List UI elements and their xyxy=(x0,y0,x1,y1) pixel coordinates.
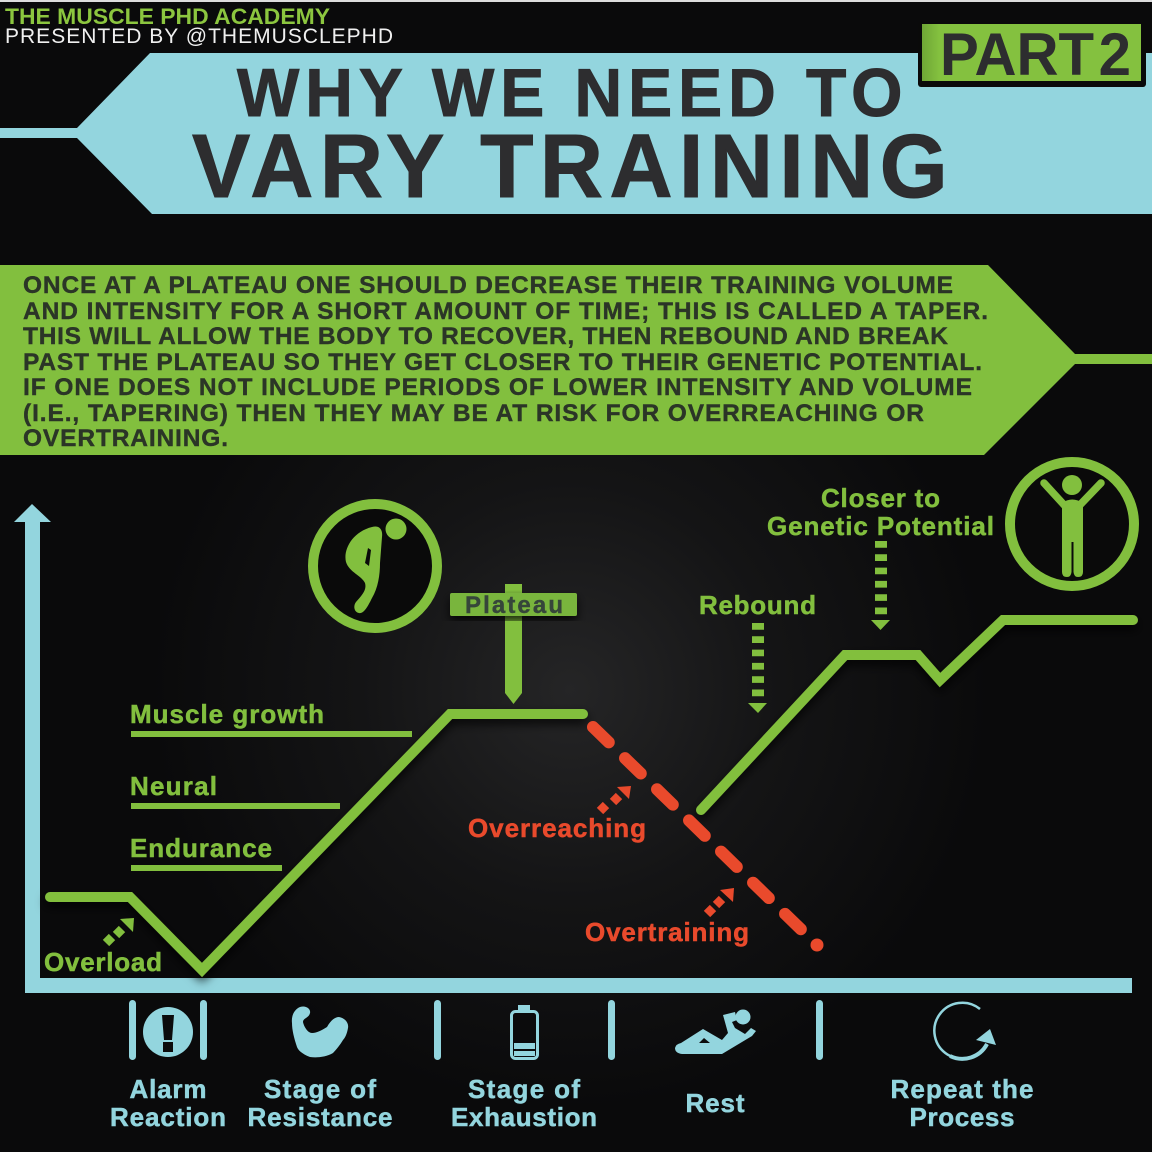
adaptation labels: Neural xyxy=(130,771,217,801)
academy header xyxy=(5,4,393,48)
overreaching label with arrow: Overreaching xyxy=(468,813,646,843)
icon: battery xyxy=(512,1005,538,1058)
stage labels: Stage of xyxy=(264,1074,376,1104)
intro text: AND INTENSITY FOR A SHORT AMOUNT OF TIME; THIS IS CALLED A TAPER. xyxy=(23,298,988,325)
overtraining label with arrow xyxy=(585,888,749,947)
genetic potential label with arrow xyxy=(767,483,994,630)
title banner xyxy=(0,53,1152,216)
genetic potential label with arrow: Genetic Potential xyxy=(767,511,994,541)
stage labels: Rest xyxy=(686,1088,745,1118)
academy header: PRESENTED BY @THEMUSCLEPHD xyxy=(5,25,393,48)
icon: slumped figure xyxy=(313,504,437,628)
stage labels: Resistance xyxy=(248,1102,392,1132)
plateau sign xyxy=(450,584,577,704)
icon: resting figure xyxy=(675,1010,756,1054)
rebound label with arrow: Rebound xyxy=(699,590,816,620)
overload label with arrow xyxy=(44,918,162,977)
stage labels: Exhaustion xyxy=(451,1102,597,1132)
stage labels: Reaction xyxy=(110,1102,226,1132)
chart axes xyxy=(14,504,1132,993)
intro text: (I.E., TAPERING) THEN THEY MAY BE AT RISK FOR OVERREACHING OR xyxy=(23,400,924,427)
adaptation labels xyxy=(130,699,412,871)
title text xyxy=(192,55,948,216)
intro text: IF ONE DOES NOT INCLUDE PERIODS OF LOWER INTENSITY AND VOLUME xyxy=(23,374,972,401)
intro text: THIS WILL ALLOW THE BODY TO RECOVER, THEN REBOUND AND BREAK xyxy=(23,323,948,350)
plateau sign: Plateau xyxy=(465,592,563,619)
overtraining label with arrow: Overtraining xyxy=(585,917,749,947)
academy header: THE MUSCLE PHD ACADEMY xyxy=(5,4,330,29)
overload label with arrow: Overload xyxy=(44,947,162,977)
title text: VARY TRAINING xyxy=(192,116,948,216)
intro text: PAST THE PLATEAU SO THEY GET CLOSER TO THEIR GENETIC POTENTIAL. xyxy=(23,349,982,376)
intro text xyxy=(23,272,988,452)
adaptation labels: Endurance xyxy=(130,833,272,863)
intro text: ONCE AT A PLATEAU ONE SHOULD DECREASE THEIR TRAINING VOLUME xyxy=(23,272,953,299)
icon: flexed arm xyxy=(292,1006,348,1057)
part 2 badge: PART 2 xyxy=(940,21,1131,88)
rebound label with arrow xyxy=(699,590,816,713)
overtraining decline line xyxy=(593,727,824,952)
training curve: first cycle xyxy=(50,714,583,970)
stage labels: Alarm xyxy=(130,1074,206,1104)
stage labels: Stage of xyxy=(468,1074,580,1104)
overreaching label with arrow xyxy=(468,786,646,843)
genetic potential label with arrow: Closer to xyxy=(821,483,940,513)
icon: alarm xyxy=(143,1007,193,1057)
stage labels: Repeat the xyxy=(890,1074,1034,1104)
icon: repeat arrow xyxy=(934,1003,996,1059)
intro panel xyxy=(0,265,1152,455)
icon: raised arms figure xyxy=(1010,462,1134,586)
intro text: OVERTRAINING. xyxy=(23,425,228,452)
stage labels: Process xyxy=(910,1102,1014,1132)
training curve: rebound xyxy=(701,620,1133,810)
adaptation labels: Muscle growth xyxy=(130,699,324,729)
title text: WHY WE NEED TO xyxy=(237,55,902,131)
stage labels xyxy=(110,1074,1034,1132)
stage dividers xyxy=(129,1000,823,1060)
